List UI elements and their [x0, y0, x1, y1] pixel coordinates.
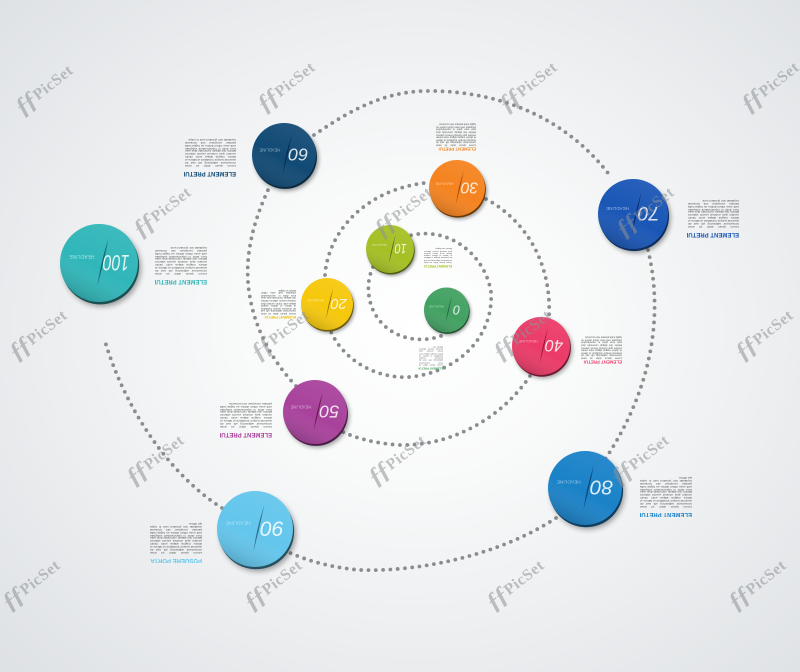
caption 20: ELEMENT PRETUI	[265, 315, 296, 319]
circle 100	[60, 224, 141, 307]
caption 10: ELEMENT PRETUI	[424, 264, 452, 268]
circle 30: HEADLINE	[435, 181, 454, 185]
watermarks: ƒƒPicSet	[238, 557, 306, 616]
watermarks: ƒƒPicSet	[251, 59, 319, 118]
watermarks: ƒƒPicSet	[605, 432, 673, 491]
caption 40: ELEMENT PRETUI	[584, 359, 622, 364]
watermarks: ƒƒPicSet	[493, 59, 561, 118]
circle 0: 0	[453, 302, 460, 316]
circle 90: HEADLINE	[225, 519, 251, 525]
circle 50: 50	[319, 402, 339, 422]
watermarks: ƒƒPicSet	[127, 184, 195, 243]
watermarks: ƒƒPicSet	[729, 307, 797, 366]
circle 60	[252, 123, 319, 191]
watermarks: ƒƒPicSet	[368, 184, 436, 243]
caption 100: ELEMENT PRETUI	[155, 278, 207, 284]
caption 50: ELEMENT PRETUI	[220, 431, 272, 437]
caption 60: Lorem ipsum dolor sit amet consectetur adipiscing elit sed do eiusmod tempor incididunt ut labore et dolore magna aliqua enim minim veniam quis nostrud exercit ullamco laboris nisi aliquip commodo duis aute irure dolor in reprehenderit voluptate velit esse cillum dolore eu fugiat nulla pariatur excepteur sint occaecat cupidatat non proident sunt in culpa.	[185, 138, 236, 168]
caption 70: ELEMENT PRETUI	[687, 231, 739, 237]
circle 80: 80	[590, 476, 613, 499]
circle 80: HEADLINE	[557, 479, 581, 485]
circle 80	[548, 451, 625, 529]
caption 0: ELEMENT PRETUI	[419, 367, 443, 371]
caption 80: Lorem ipsum dolor sit amet consectetur adipiscing elit sed do eiusmod tempor incididunt ut labore et dolore magna aliqua enim minim veniam quis nostrud exercit ullamco laboris nisi aliquip commodo duis aute irure dolor in reprehenderit voluptate velit esse cillum dolore eu fugiat nulla pariatur excepteur sint occaecat cupidatat non proident sunt in culpa qui officia.	[640, 476, 692, 509]
circle 0: HEADLINE	[429, 304, 444, 308]
watermarks: ƒƒPicSet	[487, 307, 555, 366]
caption 90: Lorem ipsum dolor sit amet consectetur adipiscing elit sed do eiusmod tempor incididunt ut labore et dolore magna aliqua enim minim veniam quis nostrud exercit ullamco laboris nisi aliquip commodo duis aute irure dolor in reprehenderit voluptate velit esse cillum dolore eu fugiat nulla pariatur excepteur sint occaecat cupidatat non proident sunt in culpa qui officia.	[150, 522, 202, 555]
circle 60: 60	[288, 145, 308, 165]
circle 70: HEADLINE	[606, 206, 629, 211]
watermarks: ƒƒPicSet	[9, 62, 77, 121]
caption 30: ELEMENT PRETUI	[439, 146, 476, 151]
circle 60: HEADLINE	[259, 148, 280, 153]
circle 20: HEADLINE	[306, 298, 324, 302]
circle 100: HEADLINE	[69, 253, 95, 259]
circle 40: HEADLINE	[518, 339, 538, 343]
caption 60: ELEMENT PRETUI	[184, 170, 236, 176]
caption 80: ELEMENT PRETUI	[640, 511, 692, 517]
watermarks: ƒƒPicSet	[610, 184, 678, 243]
circle 100: 100	[103, 250, 129, 275]
watermarks: ƒƒPicSet	[362, 432, 430, 491]
circle 70	[598, 179, 671, 253]
watermarks: ƒƒPicSet	[480, 557, 548, 616]
circle 50: HEADLINE	[290, 405, 311, 410]
watermarks: ƒƒPicSet	[120, 432, 188, 491]
caption 100: Lorem ipsum dolor sit amet consectetur adipiscing elit sed do eiusmod tempor incididunt ut labore et dolore magna aliqua enim minim veniam quis nostrud exercit ullamco laboris nisi aliquip commodo duis aute irure dolor in reprehenderit voluptate velit esse cillum dolore eu fugiat nulla pariatur excepteur sint occaecat cupidatat non proident sunt.	[155, 246, 207, 276]
circle 40	[512, 317, 572, 378]
caption 90: POSUERE PORTA	[150, 557, 202, 563]
circle 70: 70	[638, 202, 660, 224]
caption 70: Lorem ipsum dolor sit amet consectetur adipiscing elit sed do eiusmod tempor incididunt ut labore et dolore magna aliqua enim minim veniam quis nostrud exercit ullamco laboris nisi aliquip commodo duis aute irure dolor in reprehenderit voluptate velit esse cillum dolore eu fugiat nulla pariatur excepteur sint occaecat cupidatat non proident sunt.	[688, 199, 739, 229]
caption 20: Lorem ipsum dolor sit amet consectetur adipiscing elit sed do eiusmod tempor incididunt ut labore et dolore magna aliqua enim minim veniam quis nostrud exercit ullamco laboris nisi aliquip commodo duis aute irure dolor in reprehenderit voluptate velit esse cillum dolore eu fugiat.	[261, 289, 296, 315]
caption 0: Lorem ipsum dolor sit amet consectetur adipiscing elit sed do eiusmod tempor incididunt ut labore et dolore magna aliqua enim minim veniam quis nostrud exercit ullamco laboris nisi.	[419, 345, 443, 366]
caption 30: Lorem ipsum dolor sit amet consectetur adipiscing elit sed do eiusmod tempor incididunt ut labore et dolore magna aliqua enim minim veniam quis nostrud exercit ullamco laboris nisi aliquip commodo duis aute irure dolor in reprehenderit voluptate velit esse cillum dolore eu fugiat nulla pariatur sint occaecat.	[436, 123, 476, 146]
circle 10: 10	[394, 241, 407, 256]
circle 90: 90	[260, 516, 284, 540]
circle 90	[217, 491, 296, 572]
circle 30: 30	[461, 178, 478, 195]
caption 50: Lorem ipsum dolor sit amet consectetur adipiscing elit sed do eiusmod tempor incididunt ut labore et dolore magna aliqua enim minim veniam quis nostrud exercit ullamco laboris nisi aliquip commodo duis aute irure dolor in reprehenderit voluptate velit esse cillum dolore eu fugiat nulla pariatur excepteur sint occaecat.	[220, 402, 272, 429]
caption 10: Lorem ipsum dolor sit amet consectetur adipiscing elit sed do eiusmod tempor incididunt ut labore et dolore magna aliqua enim minim veniam quis nostrud exercit ullamco laboris nisi aliquip.	[424, 247, 452, 263]
circle 10: HEADLINE	[372, 243, 387, 247]
watermarks: ƒƒPicSet	[245, 307, 313, 366]
watermarks: ƒƒPicSet	[722, 557, 790, 616]
circle 50	[283, 380, 350, 448]
circle 40: 40	[545, 336, 563, 354]
circle 20	[301, 278, 355, 333]
watermarks: ƒƒPicSet	[3, 307, 71, 366]
circle 30	[429, 160, 487, 219]
caption 40: Lorem ipsum dolor sit amet consectetur adipiscing elit sed do eiusmod tempor incididunt ut labore et dolore magna aliqua enim minim veniam quis nostrud exercit ullamco laboris nisi aliquip commodo duis aute irure dolor in reprehenderit voluptate velit esse cillum dolore eu fugiat nulla pariatur sint occaecat.	[581, 336, 622, 359]
circle 10	[366, 225, 416, 276]
circle 20: 20	[331, 295, 348, 311]
circle 0	[424, 288, 471, 335]
